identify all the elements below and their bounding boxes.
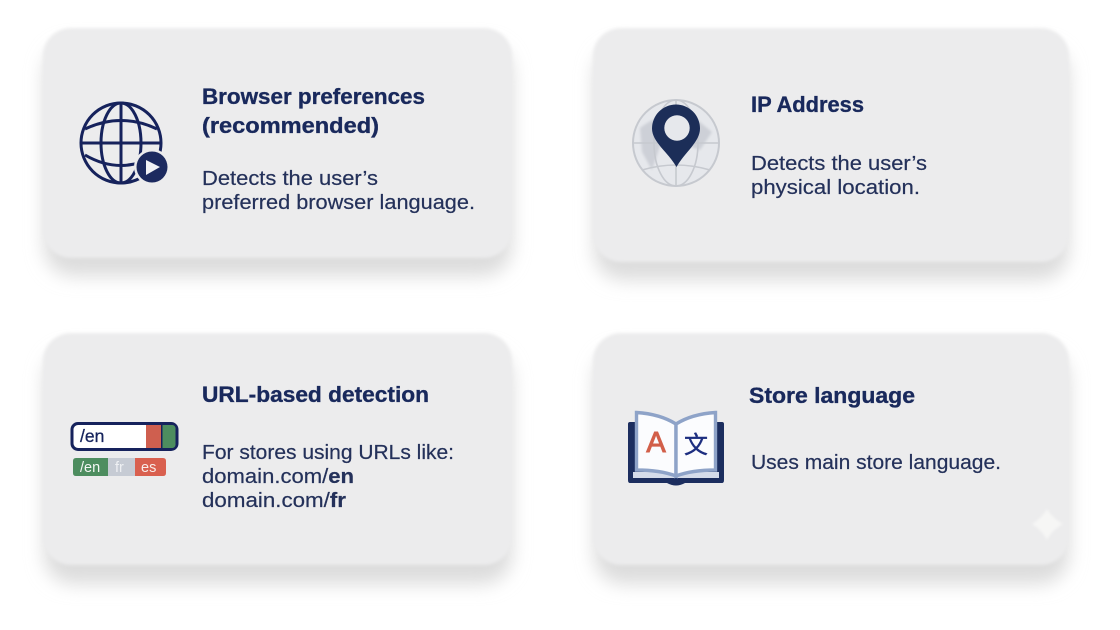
heading: browser preferences — [202, 84, 425, 138]
icon: open translation book: A — [646, 427, 666, 459]
icon: URL bar with language tabs — [72, 424, 177, 476]
icon: open translation book: 文 — [684, 432, 708, 459]
text: IP address description: physical location. — [751, 176, 920, 199]
icon: URL bar with language tabs: fr — [115, 460, 124, 476]
heading: IP address: IP Address — [751, 92, 864, 117]
icon: open translation book — [628, 412, 724, 486]
panel: IP address — [593, 28, 1069, 280]
icon: location pin on globe — [633, 100, 719, 186]
heading: store language: Store language — [749, 383, 915, 408]
icon: URL bar with language tabs: es — [141, 460, 156, 476]
heading: URL-based detection: URL-based detection — [202, 382, 429, 407]
text: URL-based description: domain.com/ fr — [202, 489, 346, 512]
icon: URL bar with language tabs: /en — [80, 426, 104, 446]
icon: sparkle watermark — [1032, 509, 1063, 540]
text: URL-based description: For stores using URLs like: — [202, 441, 454, 464]
icon: globe with play button — [81, 103, 170, 185]
panel: URL-based detection — [43, 333, 512, 584]
text: browser preferences description: Detects the user’s — [202, 167, 378, 190]
text: URL-based description: domain.com/ en — [202, 465, 354, 488]
text: IP address description — [751, 152, 927, 199]
icon: URL bar with language tabs: /en — [80, 460, 100, 476]
text: browser preferences description — [202, 167, 475, 214]
panel: browser preferences — [43, 28, 512, 276]
heading: browser preferences: (recommended) — [202, 113, 379, 138]
text: browser preferences description: preferred browser language. — [202, 191, 475, 214]
heading: browser preferences: Browser preferences — [202, 84, 425, 109]
text: URL-based description — [202, 441, 454, 512]
text: IP address description: Detects the user’s — [751, 152, 927, 175]
text: store language description: Uses main store language. — [751, 451, 1001, 474]
panel: store language — [593, 333, 1069, 584]
